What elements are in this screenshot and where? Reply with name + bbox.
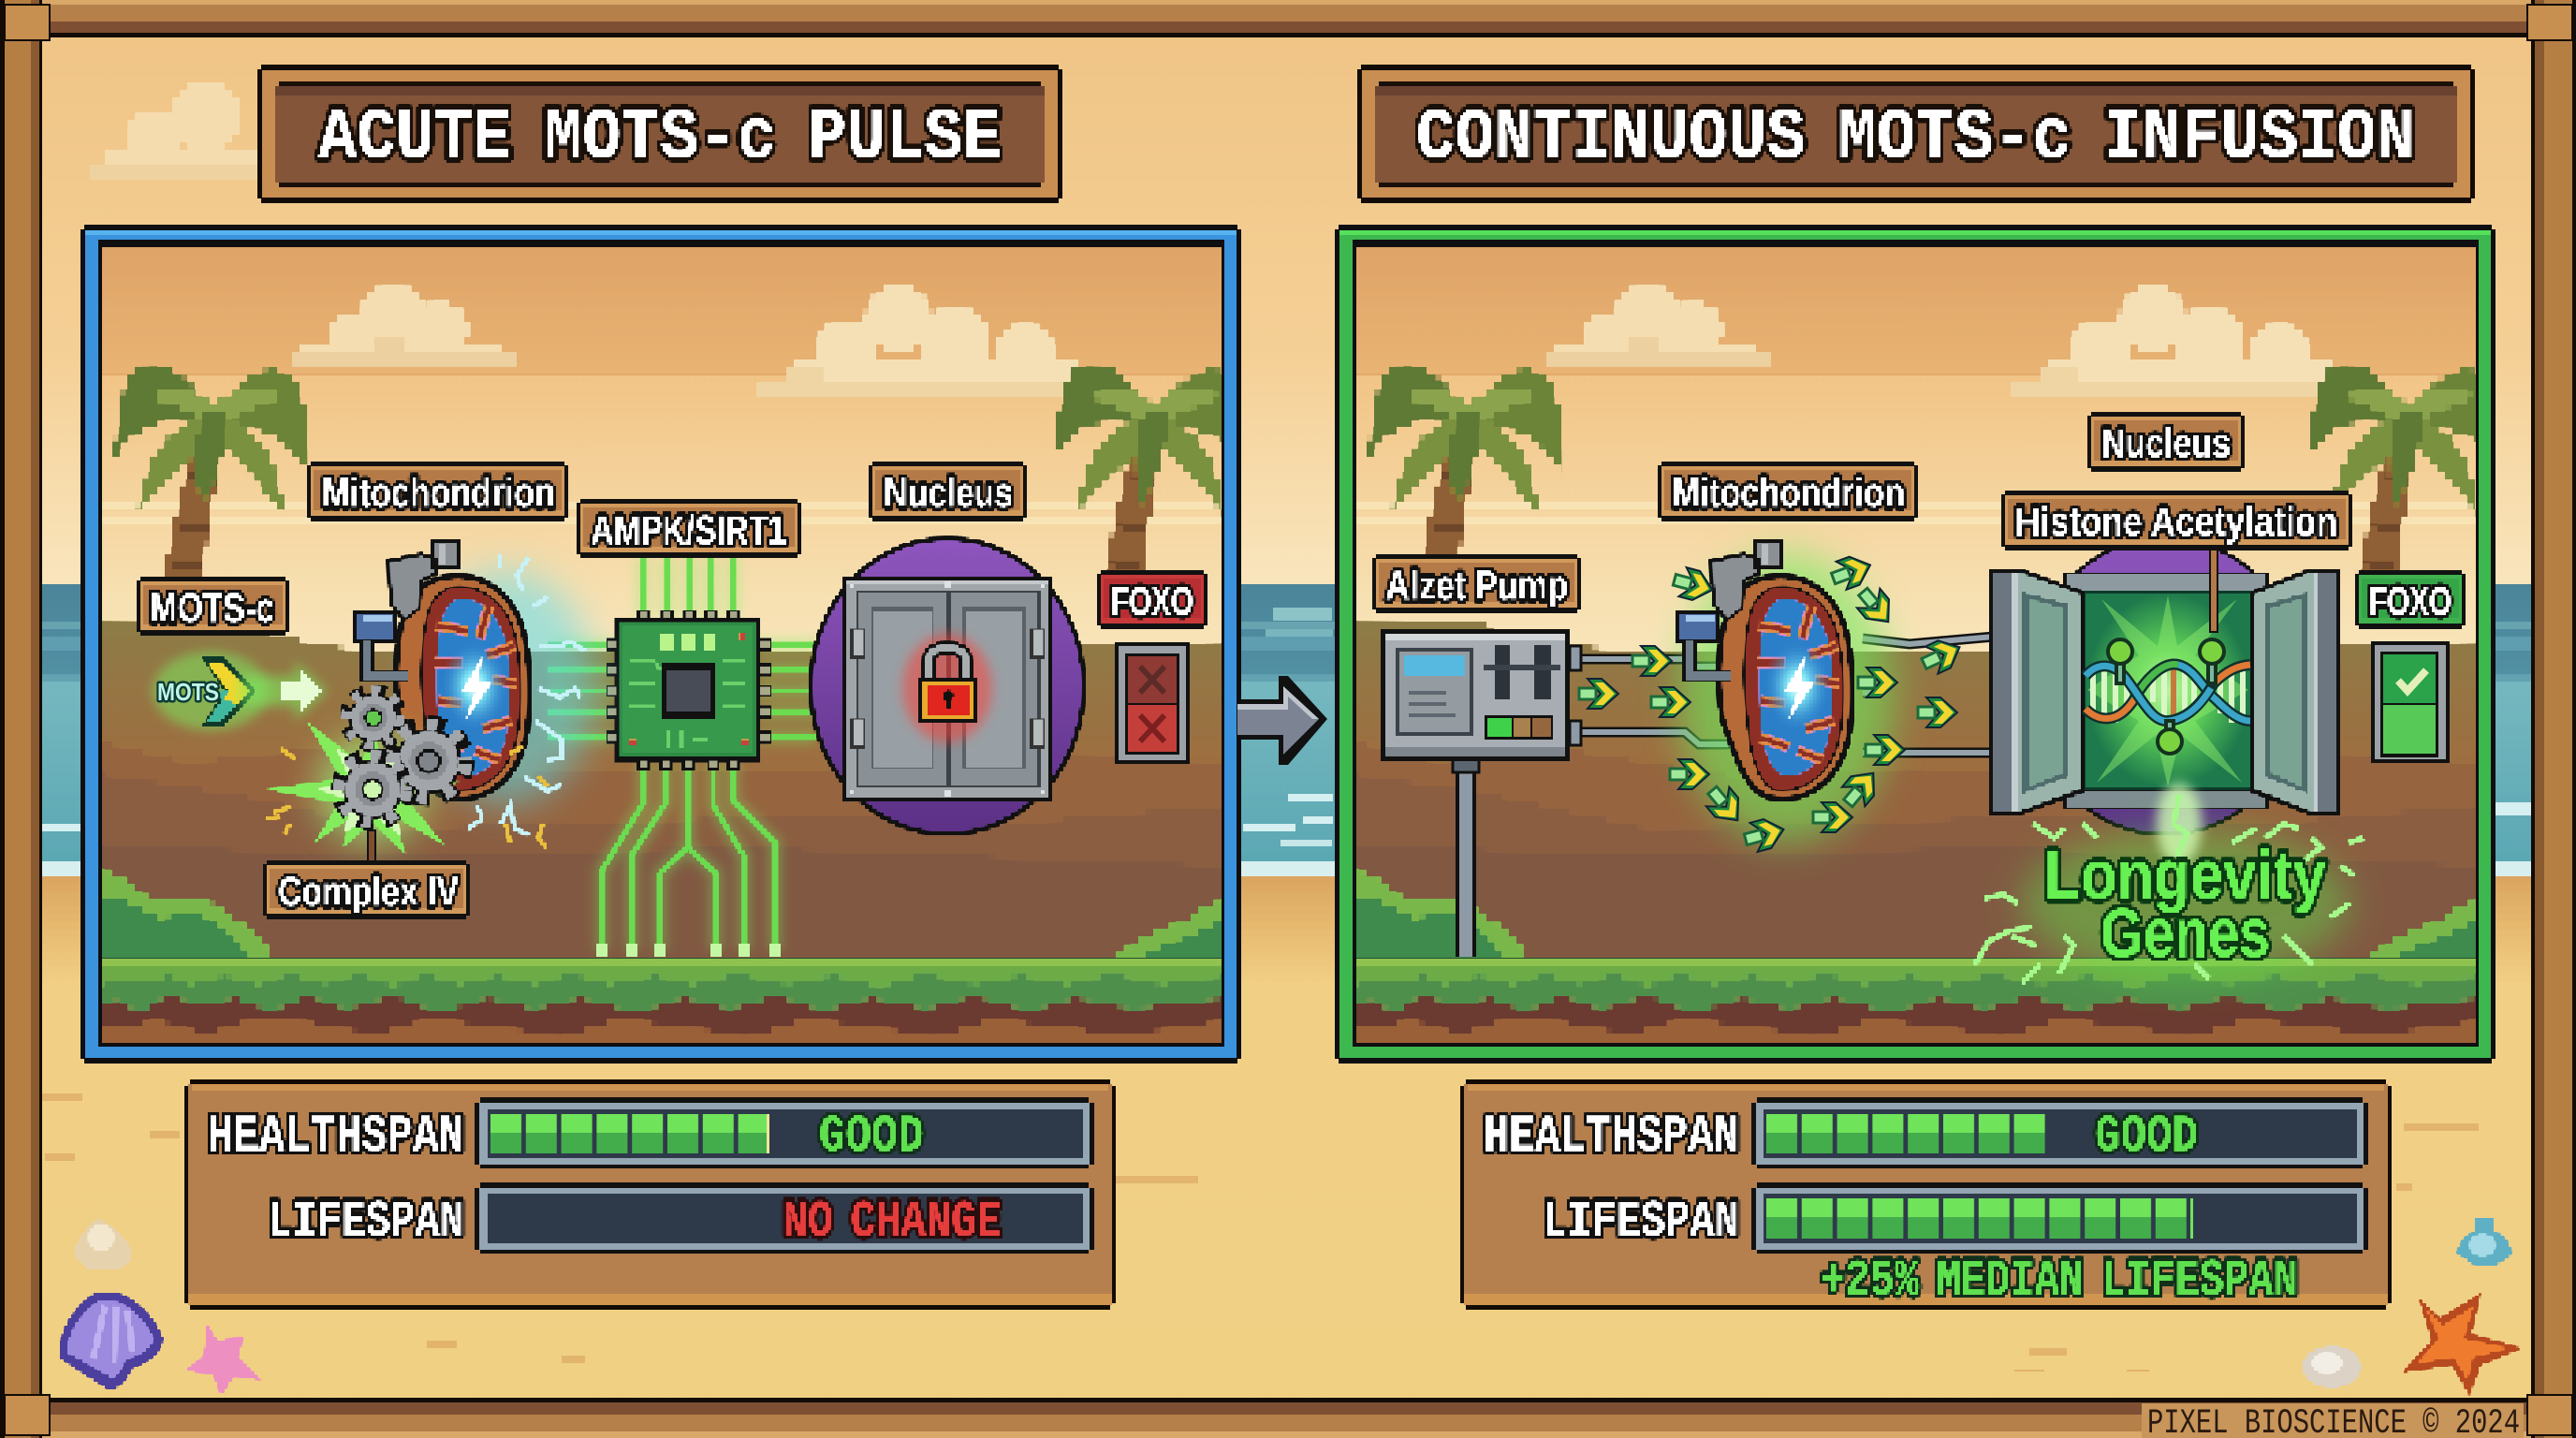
icon: red padlock bbox=[902, 634, 992, 742]
left door bbox=[1990, 569, 2084, 814]
label: Histone Acetylation: Histone Acetylation bbox=[2015, 499, 2337, 545]
label: Alzet Pump bbox=[1372, 554, 1581, 613]
panel: continuous outcomes bbox=[1460, 1079, 2392, 1311]
icon: white shell bbox=[2303, 1346, 2361, 1387]
callout: Longevity Genes: Longevity bbox=[2044, 836, 2326, 914]
icon: FOXO on switch bbox=[2371, 641, 2450, 763]
icon: Alzet pump bbox=[1381, 629, 1581, 957]
healthspan bar bbox=[1751, 1097, 2368, 1168]
icon: purple shell bbox=[60, 1294, 163, 1390]
label: MOTS-c: MOTS-c bbox=[150, 585, 274, 631]
label: Histone Acetylation bbox=[2001, 491, 2352, 550]
icon: MOTS-c peptide arrow bbox=[153, 652, 269, 730]
connector to Complex IV bbox=[368, 830, 375, 862]
lifespan bar bbox=[475, 1182, 1094, 1254]
label: AMPK/SIRT1 bbox=[577, 499, 801, 558]
icon: mitochondrion glow bbox=[417, 571, 594, 805]
label: Nucleus: Nucleus bbox=[2101, 420, 2231, 466]
connector: histone to DNA bbox=[2210, 548, 2217, 632]
lifespan bar bbox=[1751, 1182, 2368, 1254]
lifespan label: LIFESPAN bbox=[268, 1192, 464, 1252]
icon: circuit chip AMPK/SIRT1 bbox=[607, 610, 771, 770]
label: Mitochondrion bbox=[1658, 462, 1918, 521]
healthspan label: HEALTHSPAN bbox=[1484, 1107, 1739, 1167]
icon: glowing pulse arrow bbox=[239, 661, 328, 721]
callout: Longevity Genes bbox=[2044, 836, 2326, 972]
label: Nucleus bbox=[869, 462, 1027, 521]
tubes from pump bbox=[1570, 637, 1994, 753]
label: FOXO active bbox=[2355, 570, 2466, 629]
label: MOTS-c bbox=[137, 577, 289, 636]
title: continuous infusion: CONTINUOUS MOTS-c INFUSION bbox=[1416, 97, 2415, 180]
label: Alzet Pump: Alzet Pump bbox=[1385, 563, 1568, 609]
icon: mitochondrion bbox=[1678, 541, 1852, 799]
label: FOXO inactive: FOXO bbox=[1111, 579, 1193, 624]
label: Nucleus bbox=[2087, 412, 2245, 472]
icon: orange starfish bbox=[2403, 1294, 2522, 1395]
icon: mitochondrion glow bbox=[1678, 552, 1894, 843]
panel: continuous infusion scene bbox=[1335, 225, 2504, 1064]
label: Mitochondrion: Mitochondrion bbox=[1672, 470, 1905, 516]
icon: beige shell bbox=[74, 1219, 132, 1270]
label: AMPK/SIRT1: AMPK/SIRT1 bbox=[591, 507, 786, 553]
icon: Complex IV green burst bbox=[267, 723, 461, 855]
callout: Longevity Genes: Genes bbox=[2100, 894, 2270, 972]
chip traces bbox=[549, 558, 816, 957]
healthspan bar: GOOD bbox=[819, 1107, 924, 1167]
yellow sparks bbox=[267, 747, 548, 847]
label: Complex IV: Complex IV bbox=[278, 869, 460, 915]
acetyl groups bbox=[2108, 639, 2224, 754]
healthspan bar: GOOD bbox=[2095, 1107, 2198, 1167]
icon: open nucleus bbox=[1990, 536, 2340, 836]
label: Complex IV bbox=[263, 860, 470, 919]
right door bbox=[2251, 569, 2340, 814]
icon: DNA helix bbox=[2086, 665, 2250, 723]
lifespan bar: NO CHANGE bbox=[783, 1192, 1002, 1252]
title: acute pulse: ACUTE MOTS-c PULSE bbox=[318, 97, 1002, 180]
icon: electric sparks bbox=[468, 554, 585, 835]
lifespan label: LIFESPAN bbox=[1543, 1192, 1739, 1252]
label: FOXO active: FOXO bbox=[2369, 579, 2452, 624]
icon: locked nucleus vault bbox=[809, 536, 1086, 836]
panel: acute outcomes bbox=[184, 1079, 1116, 1310]
callout: +25% median lifespan: +25% MEDIAN LIFESPAN bbox=[1821, 1251, 2298, 1311]
healthspan label: HEALTHSPAN bbox=[208, 1107, 464, 1167]
icon: gears bbox=[340, 691, 465, 822]
title: continuous infusion bbox=[1357, 65, 2475, 203]
label: FOXO inactive bbox=[1097, 570, 1208, 629]
arrow: acute to continuous bbox=[1237, 676, 1327, 765]
icon: mitochondrion with gears bbox=[356, 541, 530, 799]
icon: FOXO off switch bbox=[1115, 642, 1190, 764]
icon: MOTS-c peptide arrow: MOTS bbox=[157, 678, 219, 706]
icon: pink starfish bbox=[186, 1325, 260, 1395]
icons: MOTS-c swarm bbox=[1579, 550, 1966, 854]
label: Mitochondrion bbox=[307, 462, 568, 521]
label: Nucleus: Nucleus bbox=[884, 470, 1013, 516]
longevity energy sparks bbox=[1975, 783, 2364, 983]
title: acute pulse bbox=[257, 65, 1062, 203]
panel: acute pulse scene bbox=[80, 225, 1250, 1064]
healthspan bar bbox=[475, 1097, 1094, 1168]
label: Mitochondrion: Mitochondrion bbox=[322, 470, 555, 516]
icon: teal shell bbox=[2457, 1219, 2511, 1266]
